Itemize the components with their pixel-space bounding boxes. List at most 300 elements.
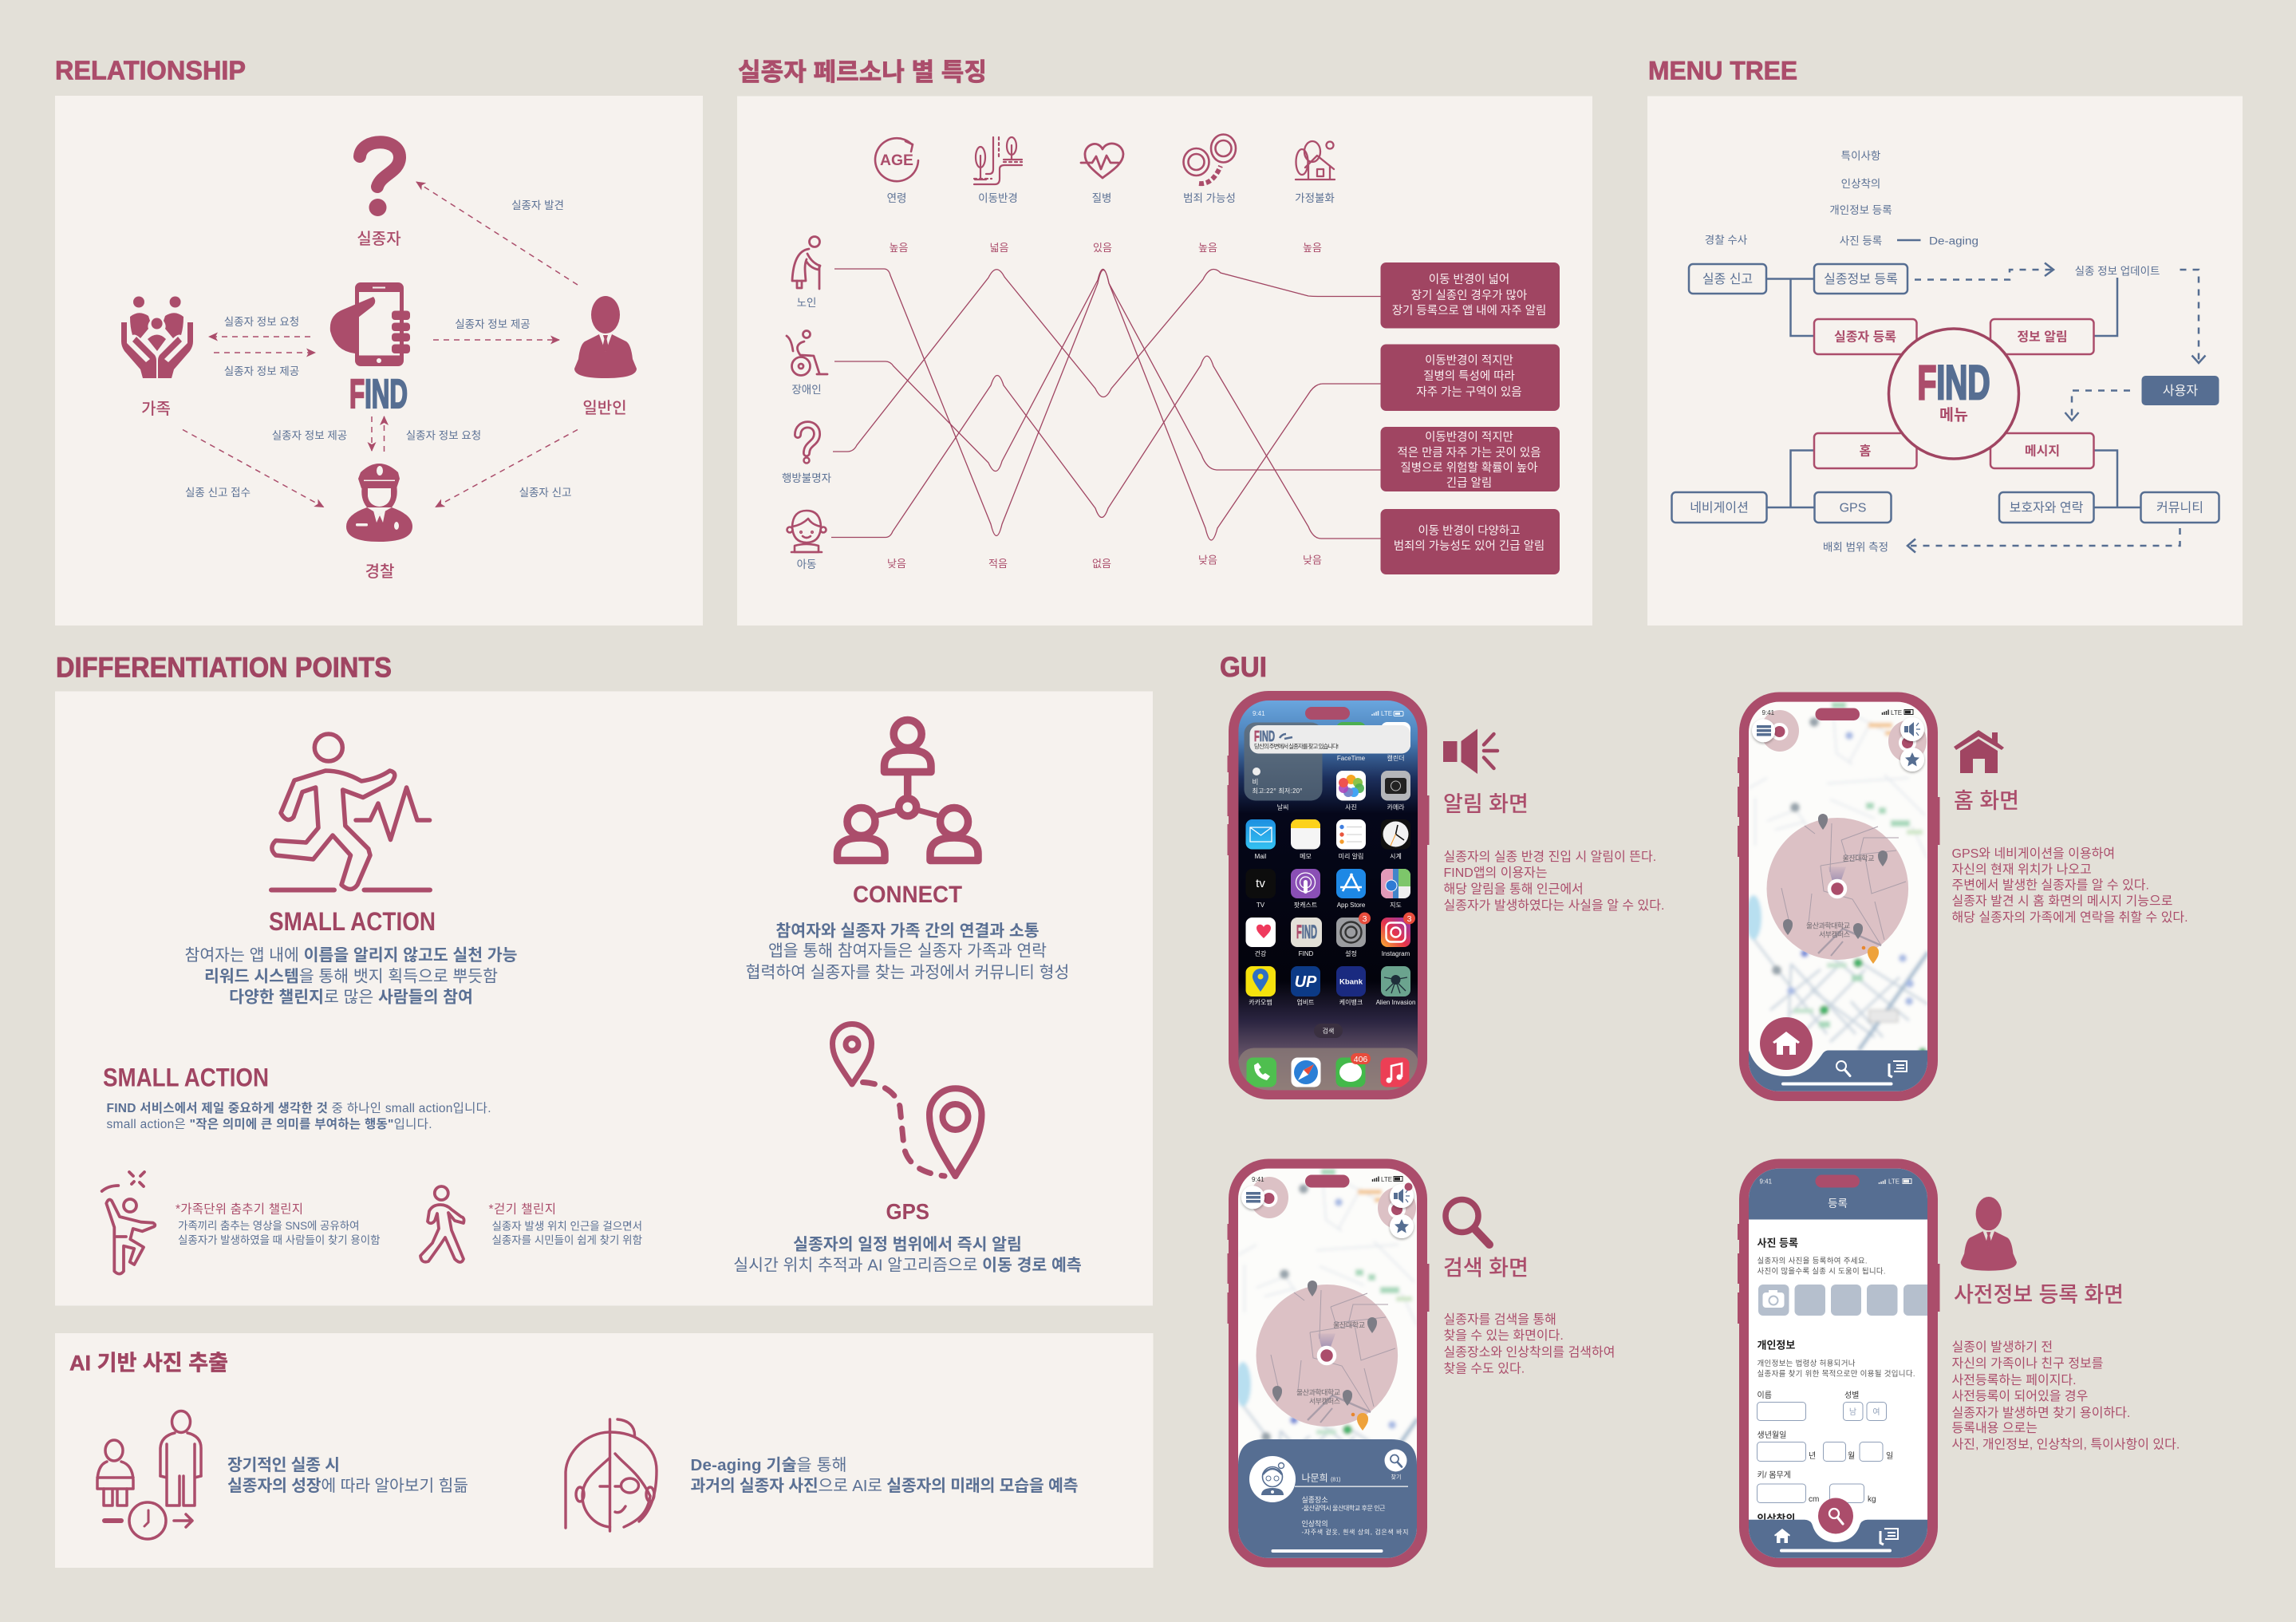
icon: heart: [1081, 144, 1123, 178]
icon: house: [1954, 730, 2004, 773]
text: home screen description: 해당 실종자의 가족에게 연락을 취할 수 있다.: [1951, 910, 2188, 925]
dock: 406: [1354, 1055, 1367, 1064]
label: info provided: 실종자 정보 제공: [224, 365, 299, 377]
text: small action detail: small action은 "작은 의미에 큰 의미를 부여하는 행동"입니다.: [107, 1117, 432, 1131]
label: info provided to police: 실종자 정보 제공: [272, 429, 347, 442]
card: child: 범죄의 가능성도 있어 긴급 알림: [1394, 539, 1544, 553]
title: home screen: 홈 화면: [1954, 789, 2019, 813]
text: gps description: 실종자의 일정 범위에서 즉시 알림: [793, 1235, 1022, 1254]
chat tab icon: [1880, 1529, 1898, 1545]
high values row: [890, 242, 1322, 254]
arrow: community to roaming range: [1907, 528, 2180, 552]
menu box: user: [2141, 376, 2219, 405]
arrow: family to app: [214, 352, 315, 353]
section: personal info: 일: [1886, 1451, 1893, 1461]
text: home screen description: 주변에서 발생한 실종자를 알 수 있다.: [1951, 878, 2149, 892]
status bar: LTE: [1888, 1178, 1900, 1186]
app icons: top row: FaceTime: [1337, 755, 1366, 762]
icon: dancer: [102, 1172, 155, 1274]
section: photo registration: [1757, 1237, 1934, 1316]
text: connect description: 협력하여 실종자를 찾는 과정에서 커뮤니티 형성: [746, 964, 1069, 981]
text: alert screen description: 실종자가 발생하였다는 사실을 알 수 있다.: [1444, 898, 1664, 913]
section: personal info: 실종자를 찾기 위한 목적으로만 이용될 것입니다.: [1757, 1369, 1915, 1379]
low values row: 낮음: [887, 558, 906, 570]
section: personal info: 성별: [1844, 1391, 1859, 1400]
app icon: reminders: 미리 알림: [1339, 852, 1363, 860]
text: small action description: 리워드 시스템을 통해 뱃지 획득으로 뿌듯함: [204, 967, 498, 986]
registered details list: 특이사항: [1841, 150, 1880, 162]
section: personal info: 월: [1848, 1451, 1855, 1461]
icon: gps route: [833, 1024, 981, 1176]
text: search screen description: 실종자를 검색을 통해: [1444, 1312, 1556, 1327]
label: report received: 실종 신고 접수: [185, 487, 251, 499]
panel: persona traits: [737, 96, 1592, 626]
icon: wheelchair: [787, 330, 827, 375]
centre circle: FIND menu: 메뉴: [1939, 407, 1968, 424]
column labels: [887, 192, 1335, 204]
dynamic island: [1816, 708, 1860, 720]
app icon: App Store: [1336, 869, 1366, 909]
map buttons: [1241, 1184, 1414, 1238]
text: small action description: 참여자는 앱 내에 이름을 알리지 않고도 실천 가능: [184, 946, 518, 965]
app icon: mail: [1246, 819, 1276, 860]
search pill: 검색: [1323, 1027, 1334, 1035]
menu box: message: 메시지: [2025, 444, 2060, 458]
card: disabled: 이동반경이 적지만: [1425, 354, 1513, 367]
text: walking challenge: 실종자를 시민들이 쉽게 찾기 위함: [491, 1234, 642, 1246]
status bar: LTE: [1381, 1176, 1392, 1183]
label: found: 실종자 발견: [511, 199, 564, 211]
icon: growth over time: [97, 1411, 201, 1539]
icon: family house: [1296, 141, 1335, 180]
search radius circle: 울산대학교: [1333, 1321, 1365, 1329]
chat tab icon: [1889, 1061, 1907, 1077]
text: pre-registration description: 사전등록이 되어있을 경우: [1951, 1389, 2088, 1403]
text: home screen description: 실종자 발견 시 홈 화면의 메시지 기능으로: [1951, 894, 2172, 908]
status bar: [1761, 709, 1913, 716]
icon: runner: [271, 734, 430, 890]
icon: person: [1961, 1197, 2017, 1271]
menu box: GPS: GPS: [1840, 501, 1866, 515]
icon: elderly: [792, 236, 820, 289]
label: info request: 실종자 정보 요청: [224, 316, 299, 328]
search tab icon: [1836, 1061, 1850, 1075]
label: whereabouts unknown: 행방불명자: [782, 472, 832, 484]
registered details list: 개인정보 등록: [1829, 204, 1892, 216]
app icon: kbank: 케이뱅크: [1339, 998, 1363, 1006]
text: de-aging: De-aging 기술을 통해: [691, 1456, 847, 1474]
dynamic island: [1305, 707, 1350, 720]
status bar: LTE: [1891, 709, 1902, 716]
label: child: 아동: [797, 558, 816, 570]
icon: citizen: [574, 296, 637, 378]
notification banner: FIND: [1254, 728, 1275, 744]
text: walking challenge: 실종자 발생 위치 인근을 걸으면서: [491, 1221, 642, 1232]
column labels: 연령: [887, 192, 906, 204]
app icon: clock: 시계: [1390, 852, 1402, 860]
panel: menu tree: [1647, 96, 2243, 626]
app icons: top row: [1277, 722, 1410, 811]
text: pre-registration description: [1951, 1340, 2180, 1452]
card: unknown whereabouts: 질병으로 위험할 확률이 높아: [1400, 461, 1538, 475]
app icon: TV: tv: [1256, 877, 1265, 890]
header bar: [1749, 1168, 1927, 1219]
arrow: app to family: [209, 336, 310, 337]
column labels: 질병: [1092, 192, 1111, 204]
app icon: clock: [1381, 819, 1410, 860]
card: unknown whereabouts: [1380, 427, 1560, 491]
label: de-aging link: [1897, 235, 1978, 247]
arrow: citizen to police: [436, 429, 578, 507]
column labels: 범죄 가능성: [1183, 192, 1236, 204]
dynamic island: [1816, 1174, 1860, 1187]
text: search screen description: 실종장소와 인상착의를 검색하여: [1444, 1345, 1615, 1360]
icon: road: [974, 137, 1022, 184]
app icon: health: 건강: [1255, 949, 1267, 957]
label: info provided to citizen: 실종자 정보 제공: [455, 318, 531, 330]
search radius circle: [1250, 1177, 1416, 1431]
menu box: navigation: 네비게이션: [1690, 501, 1749, 515]
centre circle: FIND menu: [1889, 329, 2018, 459]
menu box: navigation: [1672, 492, 1766, 523]
section: personal info: 키/ 몸무게: [1757, 1470, 1791, 1480]
label: family: 가족: [141, 400, 171, 418]
section: personal info: kg: [1868, 1495, 1876, 1504]
menu box: missing person registration: 실종자 등록: [1834, 330, 1896, 345]
high values row: 높음: [1198, 242, 1217, 254]
search radius circle: 울산과학대학교: [1806, 922, 1850, 930]
status bar: LTE: [1381, 710, 1392, 717]
title: alert screen: 알림 화면: [1443, 792, 1529, 816]
text: small action detail: [107, 1101, 491, 1131]
text: pre-registration description: 사전등록하는 페이지다.: [1951, 1373, 2077, 1387]
menu box: home: 홈: [1860, 444, 1872, 458]
app icon: upbit: [1291, 966, 1320, 1006]
panel: differentiation points: [55, 691, 1153, 1305]
app icon: maps: 지도: [1390, 902, 1402, 909]
home indicator: [1781, 1082, 1892, 1085]
status bar: 9:41: [1252, 1176, 1264, 1183]
heading: persona: 실종자 페르소나 별 특징: [738, 58, 987, 86]
section: photo registration: 사진이 많을수록 실종 시 도움이 됩니다.: [1757, 1267, 1886, 1277]
bottom tab bar: [1749, 1520, 1927, 1558]
menu box: contact guardian: [1999, 492, 2093, 523]
low values row: 적음: [988, 558, 1008, 570]
search radius circle: 서부캠퍼스: [1819, 930, 1850, 938]
text: connect description: [746, 922, 1069, 981]
button: search: [1385, 1449, 1407, 1471]
arrow: app to police: [371, 416, 373, 451]
registered details list: 사진 등록: [1840, 235, 1882, 247]
app icon: maps: [1381, 869, 1410, 909]
search pill: [1314, 1024, 1343, 1038]
phone: pre-registration screen: [1738, 1158, 1940, 1567]
app icon: upbit: 업비트: [1296, 999, 1315, 1006]
heading: connect: CONNECT: [853, 882, 962, 908]
label: citizen: 일반인: [582, 399, 627, 417]
search radius circle: 서부캠퍼스: [1309, 1396, 1340, 1406]
app icons: top row: 날씨: [1277, 803, 1288, 811]
status bar: 9:41: [1253, 710, 1265, 717]
app icon: kakao map: 카카오맵: [1249, 998, 1272, 1006]
section: personal info: 년: [1809, 1451, 1816, 1461]
icon: speaker: [1443, 729, 1497, 774]
text: family dance challenge: 실종자가 발생하였을 때 사람들이 찾기 용이함: [178, 1234, 380, 1246]
status bar: [1252, 1176, 1402, 1183]
card: disabled: 자주 가는 구역이 있음: [1416, 385, 1522, 399]
label: missing person: 실종자: [357, 230, 401, 248]
search radius circle: 울산대학교: [1843, 854, 1875, 862]
high values row: 높음: [890, 242, 908, 254]
menu box: missing person registration: [1814, 319, 1916, 354]
heading: gps: GPS: [886, 1199, 929, 1224]
line: unknown whereabouts to card 1: [833, 270, 1381, 452]
icon: family in hands: [121, 297, 193, 378]
low values row: [887, 554, 1322, 570]
section: personal info: 인상착의: [1757, 1513, 1795, 1525]
home tab icon: [1774, 1529, 1790, 1543]
card: elderly: [1380, 262, 1560, 329]
profile details: 나문희 (81): [1302, 1473, 1340, 1484]
text: small action detail: FIND 서비스에서 제일 중요하게 생각한 것 중 하나인 small action입니다.: [107, 1101, 491, 1115]
app icon: upbit: UP: [1295, 973, 1317, 991]
app icon: TV: [1246, 869, 1276, 909]
app icon: alien invasion: Alien Invasion: [1376, 999, 1415, 1006]
text: walking challenge: [488, 1202, 642, 1246]
card: elderly: 이동 반경이 넓어: [1429, 273, 1509, 286]
app icon: FIND: FIND: [1299, 950, 1314, 957]
heading: small action: SMALL ACTION: [269, 907, 436, 936]
text: pre-registration description: 실종자가 발생하면 찾기 용이하다.: [1951, 1406, 2130, 1420]
panel: relationship: [55, 96, 703, 626]
app icon: settings: 설정: [1345, 949, 1357, 957]
text: alert screen description: [1444, 850, 1664, 913]
heading: relationship: RELATIONSHIP: [55, 56, 246, 85]
text: alert screen description: 해당 알림을 통해 인근에서: [1444, 882, 1584, 897]
section: personal info: cm: [1809, 1495, 1819, 1504]
arrow: app to citizen: [433, 339, 559, 341]
dock: [1238, 1048, 1418, 1091]
text: connect description: 앱을 통해 참여자들은 실종자 가족과 연락: [768, 941, 1047, 961]
heading: AI photo extraction: AI 기반 사진 추출: [69, 1352, 228, 1375]
app icon: reminders: [1336, 819, 1366, 860]
card: unknown whereabouts: 적은 만큼 자주 가는 곳이 있음: [1397, 446, 1541, 460]
text: alert screen description: FIND앱의 이용자는: [1444, 866, 1548, 880]
search radius circle: 울산과학대학교: [1296, 1388, 1340, 1396]
column labels: 가정불화: [1295, 192, 1335, 204]
notification banner: 당신의 주변에서 실종자를 찾고 있습니다!: [1254, 742, 1339, 750]
centre circle: FIND menu: FIND: [1918, 356, 1990, 409]
text: long-term missing: [227, 1456, 468, 1495]
text: gps description: 실시간 위치 추적과 AI 알고리즘으로 이동 경로 예측: [733, 1256, 1082, 1275]
icon: age: [875, 138, 918, 181]
notification banner: [1249, 725, 1410, 753]
app icon: instagram: Instagram: [1382, 950, 1410, 957]
text: home screen description: 자신의 현재 위치가 나오고: [1951, 862, 2092, 877]
menu box: contact guardian: 보호자와 연락: [2010, 501, 2084, 515]
arrow: police to app: [383, 416, 385, 452]
title: pre-registration screen: 사전정보 등록 화면: [1954, 1283, 2124, 1307]
menu box: home: [1814, 433, 1916, 468]
menu box: GPS: [1814, 492, 1891, 523]
card: child: 이동 반경이 다양하고: [1418, 524, 1521, 538]
arrow: update to user: [2180, 270, 2205, 363]
high values row: 넓음: [990, 242, 1008, 254]
text: long-term missing: 실종자의 성장에 따라 알아보기 힘듦: [227, 1477, 468, 1495]
section: personal info: 생년월일: [1757, 1431, 1786, 1440]
app icon: FIND: [1291, 918, 1322, 957]
label: police: 경찰: [365, 562, 394, 581]
app icon: health: [1246, 918, 1276, 957]
label: de-aging link: De-aging: [1929, 235, 1978, 247]
info sheet: [1238, 1439, 1417, 1558]
registered details list: 인상착의: [1841, 178, 1880, 190]
app icon: alien invasion: [1376, 966, 1415, 1006]
connector lines top left: [1766, 279, 1814, 336]
widget: weather: 비: [1253, 778, 1258, 786]
text: alert screen description: 실종자의 실종 반경 진입 시 알림이 뜬다.: [1444, 850, 1656, 864]
logo: FIND: FIND: [349, 371, 408, 416]
column labels: 이동반경: [978, 192, 1018, 204]
section: personal info: 개인정보: [1757, 1339, 1795, 1352]
panel: AI photo extraction: [55, 1333, 1154, 1568]
text: home screen description: GPS와 네비게이션을 이용하여: [1951, 847, 2115, 861]
app icons: top row: 캘린더: [1387, 754, 1405, 762]
text: pre-registration description: 실종이 발생하기 전: [1951, 1340, 2053, 1355]
card: disabled: 질병의 특성에 따라: [1423, 369, 1515, 383]
status bar: [1253, 710, 1403, 717]
heading: differentiation points: DIFFERENTIATION POINTS: [56, 653, 392, 683]
menu box: user: 사용자: [2163, 384, 2198, 398]
heading: menu tree: MENU TREE: [1648, 57, 1797, 85]
text: connect description: 참여자와 실종자 가족 간의 연결과 소통: [775, 922, 1040, 940]
status bar: 9:41: [1761, 709, 1775, 716]
arrow: family to police: [183, 429, 324, 507]
app icon: notes: 메모: [1300, 853, 1312, 860]
app icon: kbank: [1336, 966, 1366, 1006]
icon: walker: [420, 1186, 464, 1262]
app icon: mail: Mail: [1255, 853, 1267, 860]
app icon: FIND: FIND: [1296, 922, 1317, 943]
title: search screen: 검색 화면: [1443, 1256, 1529, 1280]
menu box: info alert: 정보 알림: [2017, 330, 2068, 345]
icon: hand holding phone: [330, 282, 410, 366]
label: info update: 실종 정보 업데이트: [2075, 265, 2160, 278]
section: personal info: 여: [1872, 1407, 1880, 1417]
icon: child: [787, 511, 826, 552]
notification dot: [1404, 1182, 1412, 1190]
text: home screen description: [1951, 847, 2188, 925]
low values row: 낮음: [1303, 554, 1322, 566]
home button: [1760, 1017, 1813, 1070]
search radius circle: [1761, 710, 1927, 964]
app icon: TV: TV: [1256, 902, 1265, 909]
header bar: 등록: [1828, 1198, 1848, 1210]
app icon: camera: 카메라: [1387, 804, 1405, 811]
app icon: podcasts: 팟캐스트: [1294, 901, 1317, 909]
registered details list: 경찰 수사: [1705, 235, 1748, 246]
phone: alert screen: [1227, 691, 1430, 1099]
app icon: podcasts: [1291, 869, 1320, 909]
app icon: settings: 3: [1363, 914, 1367, 924]
arrow: user to message: [2065, 391, 2130, 420]
label: report: 실종자 신고: [519, 487, 571, 499]
app icon: settings: [1336, 913, 1371, 957]
section: personal info: 남: [1849, 1407, 1856, 1417]
profile details: 실종장소: [1302, 1496, 1328, 1504]
label: info requested by police: 실종자 정보 요청: [406, 429, 481, 442]
text: pre-registration description: 등록내용 으로는: [1951, 1421, 2038, 1435]
icon: question mark: [360, 142, 400, 216]
line: disabled to card 3: [834, 269, 1381, 472]
connector lines bottom right: [2093, 450, 2141, 507]
icon: police: [346, 464, 412, 542]
menu box: info registration: 실종정보 등록: [1824, 272, 1898, 286]
section: personal info: 이름: [1757, 1391, 1772, 1400]
section: photo registration: 실종자의 사진을 등록하여 주세요.: [1757, 1256, 1867, 1265]
avatar: grandmother: [1249, 1456, 1296, 1502]
text: family dance challenge: *가족단위 춤추기 챌린지: [176, 1202, 303, 1216]
card: unknown whereabouts: 이동반경이 적지만: [1425, 431, 1513, 444]
home indicator: [1780, 1549, 1892, 1553]
text: search screen description: [1444, 1312, 1615, 1375]
low values row: 낮음: [1198, 554, 1217, 566]
map buttons: [1752, 717, 1924, 772]
heading: small action detail: SMALL ACTION: [103, 1063, 269, 1091]
text: small action description: [184, 946, 518, 1007]
dynamic island: [1305, 1174, 1350, 1187]
section: personal info: 개인정보는 법령상 허용되거나: [1757, 1359, 1856, 1368]
menu box: report: 실종 신고: [1702, 272, 1753, 286]
widget: weather: [1245, 723, 1323, 801]
icon: de-aging face: [566, 1419, 657, 1531]
menu box: report: [1689, 264, 1766, 294]
menu box: info alert: [1990, 319, 2093, 354]
search button: [1818, 1498, 1853, 1533]
bottom tab bar: [1749, 1050, 1927, 1091]
text: walking challenge: *걷기 챌린지: [488, 1202, 556, 1216]
label: roaming range: 배회 범위 측정: [1823, 541, 1888, 554]
icon: handcuffs: [1184, 134, 1236, 184]
menu box: info registration: [1814, 264, 1907, 294]
app icon: App Store: App Store: [1337, 902, 1366, 909]
text: pre-registration description: 자신의 가족이나 친구 정보를: [1951, 1356, 2103, 1371]
icon: connect network: [838, 720, 978, 860]
connector lines top right: [2093, 278, 2117, 336]
menu box: message: [1990, 433, 2093, 468]
card: child: [1380, 509, 1560, 574]
text: search screen description: 찾을 수도 있다.: [1444, 1361, 1525, 1375]
profile details: -울산광역시 울산대학교 후문 인근: [1302, 1504, 1385, 1512]
info sheet: 찾기: [1391, 1473, 1401, 1481]
card: elderly: 장기 실종인 경우가 많아: [1411, 289, 1527, 302]
text: family dance challenge: 가족끼리 춤추는 영상을 SNS에 공유하여: [178, 1220, 359, 1232]
heading: GUI: GUI: [1220, 652, 1267, 683]
line: elderly to card 2: [834, 269, 1381, 540]
icon: age: AGE: [880, 152, 913, 169]
map background: [1229, 1161, 1428, 1568]
section: personal info: [1757, 1339, 1915, 1525]
menu box: community: 커뮤니티: [2156, 501, 2203, 515]
high values row: 있음: [1093, 242, 1112, 254]
text: search screen description: 찾을 수 있는 화면이다.: [1444, 1328, 1564, 1343]
app icon: kakao map: [1246, 966, 1276, 1006]
text: gps description: [733, 1235, 1082, 1275]
text: pre-registration description: 사진, 개인정보, 인상착의, 특이사항이 있다.: [1951, 1438, 2180, 1452]
text: small action description: 다양한 챌린지로 많은 사람들의 참여: [229, 988, 473, 1007]
profile details: -자주색 겉옷, 흰색 상의, 검은색 바지: [1302, 1528, 1409, 1536]
low values row: 없음: [1092, 558, 1111, 570]
